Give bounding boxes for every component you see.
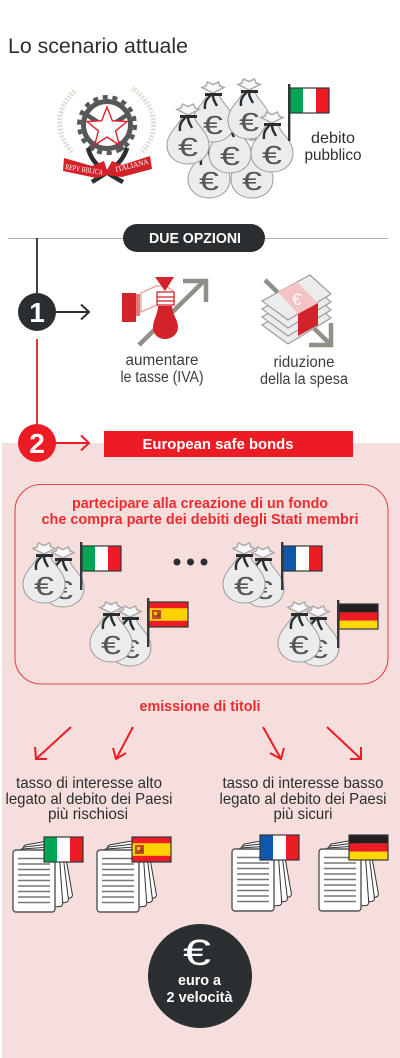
label: riduzione della spesa: riduzione (274, 354, 334, 371)
icon: pile of money bags: € (242, 166, 263, 196)
France bags and flag (223, 542, 322, 607)
arrows: four red diverging (35, 727, 361, 759)
option 1 badge (18, 293, 56, 331)
text: high interest rate (6, 775, 172, 823)
option 2 badge: 2 (29, 428, 45, 459)
connector line red (36, 339, 38, 428)
Spain bags and flag: € (120, 634, 141, 664)
text: high interest rate: legato al debito dei Paesi (6, 791, 172, 808)
label: aumentare le tasse: aumentare (126, 352, 198, 369)
text: low interest rate: tasso di interesse basso (222, 775, 384, 792)
label: riduzione della spesa (260, 354, 348, 388)
label: aumentare le tasse: le tasse (IVA) (120, 369, 204, 386)
Spain bags and flag (90, 598, 188, 666)
Italy bags and flag (23, 542, 121, 607)
label: aumentare le tasse (120, 352, 204, 386)
Germany bags and flag (278, 600, 378, 666)
text: low interest rate: legato al debito dei Paesi (220, 791, 386, 808)
heading: European safe bonds (104, 431, 353, 457)
Germany bags and flag: € (308, 634, 329, 664)
icon: Italian Republic emblem: ITALIANA (114, 157, 150, 174)
arrow: option 1 (55, 304, 89, 320)
icon: Italian flag (288, 84, 329, 141)
label: debito pubblico: debito (311, 130, 355, 147)
icon: pile of money bags: € (199, 166, 220, 196)
pink background panel (2, 443, 400, 1058)
Germany bags and flag: € (289, 630, 310, 660)
text: low interest rate (220, 775, 386, 823)
label: emissione di titoli: emissione di titoli (140, 698, 260, 715)
icon: pile of money bags: € (203, 110, 224, 140)
arrow: option 2 (55, 436, 89, 450)
heading: due opzioni: DUE OPZIONI (149, 231, 241, 247)
documents: Germany (319, 835, 388, 911)
documents: France (232, 835, 299, 911)
Italy bags and flag: € (53, 575, 74, 605)
icon: pile of money bags (167, 79, 293, 198)
panel: fund (15, 484, 388, 684)
option 2 badge (18, 424, 56, 462)
heading: due opzioni (123, 224, 265, 252)
option 1 badge: 1 (29, 297, 45, 328)
icon: pile of money bags: € (178, 132, 199, 162)
callout: euro a 2 velocità: euro a (178, 972, 222, 989)
Spain bags and flag: € (101, 630, 122, 660)
fund description: partecipare alla creazione di un fondo (72, 495, 328, 512)
label: debito pubblico: pubblico (304, 147, 362, 164)
icon: Italian Republic emblem: REPV BBLICA (65, 162, 104, 177)
text: low interest rate: più sicuri (274, 806, 332, 823)
ellipsis dots (174, 558, 208, 566)
text: high interest rate: tasso di interesse alto (16, 775, 162, 792)
fund description (42, 495, 358, 528)
France bags and flag: € (234, 571, 255, 601)
documents: Spain (97, 837, 171, 912)
France bags and flag: € (253, 575, 274, 605)
icon: spending cuts: € (292, 290, 302, 309)
Italy bags and flag: € (34, 571, 55, 601)
documents: Italy (13, 837, 83, 912)
heading: European safe bonds: European safe bonds (142, 436, 294, 453)
callout: euro a 2 velocità: € (183, 932, 211, 973)
icon: pile of money bags: € (220, 141, 241, 171)
icon: pile of money bags: € (239, 107, 260, 137)
callout: euro a 2 velocità: 2 velocità (166, 989, 233, 1006)
callout: euro a 2 velocità (148, 924, 252, 1028)
icon: raising taxes (122, 277, 206, 345)
title: Lo scenario attuale (8, 35, 188, 58)
icon: spending cuts (262, 275, 331, 345)
icon: pile of money bags: € (262, 140, 283, 170)
fund description: che compra parte dei debiti degli Stati membri (42, 511, 358, 528)
label: debito pubblico (304, 130, 362, 164)
label: riduzione della spesa: della la spesa (260, 371, 348, 388)
connector line black (36, 238, 38, 296)
icon: Italian Republic emblem (60, 88, 154, 182)
text: high interest rate: più rischiosi (48, 806, 128, 823)
